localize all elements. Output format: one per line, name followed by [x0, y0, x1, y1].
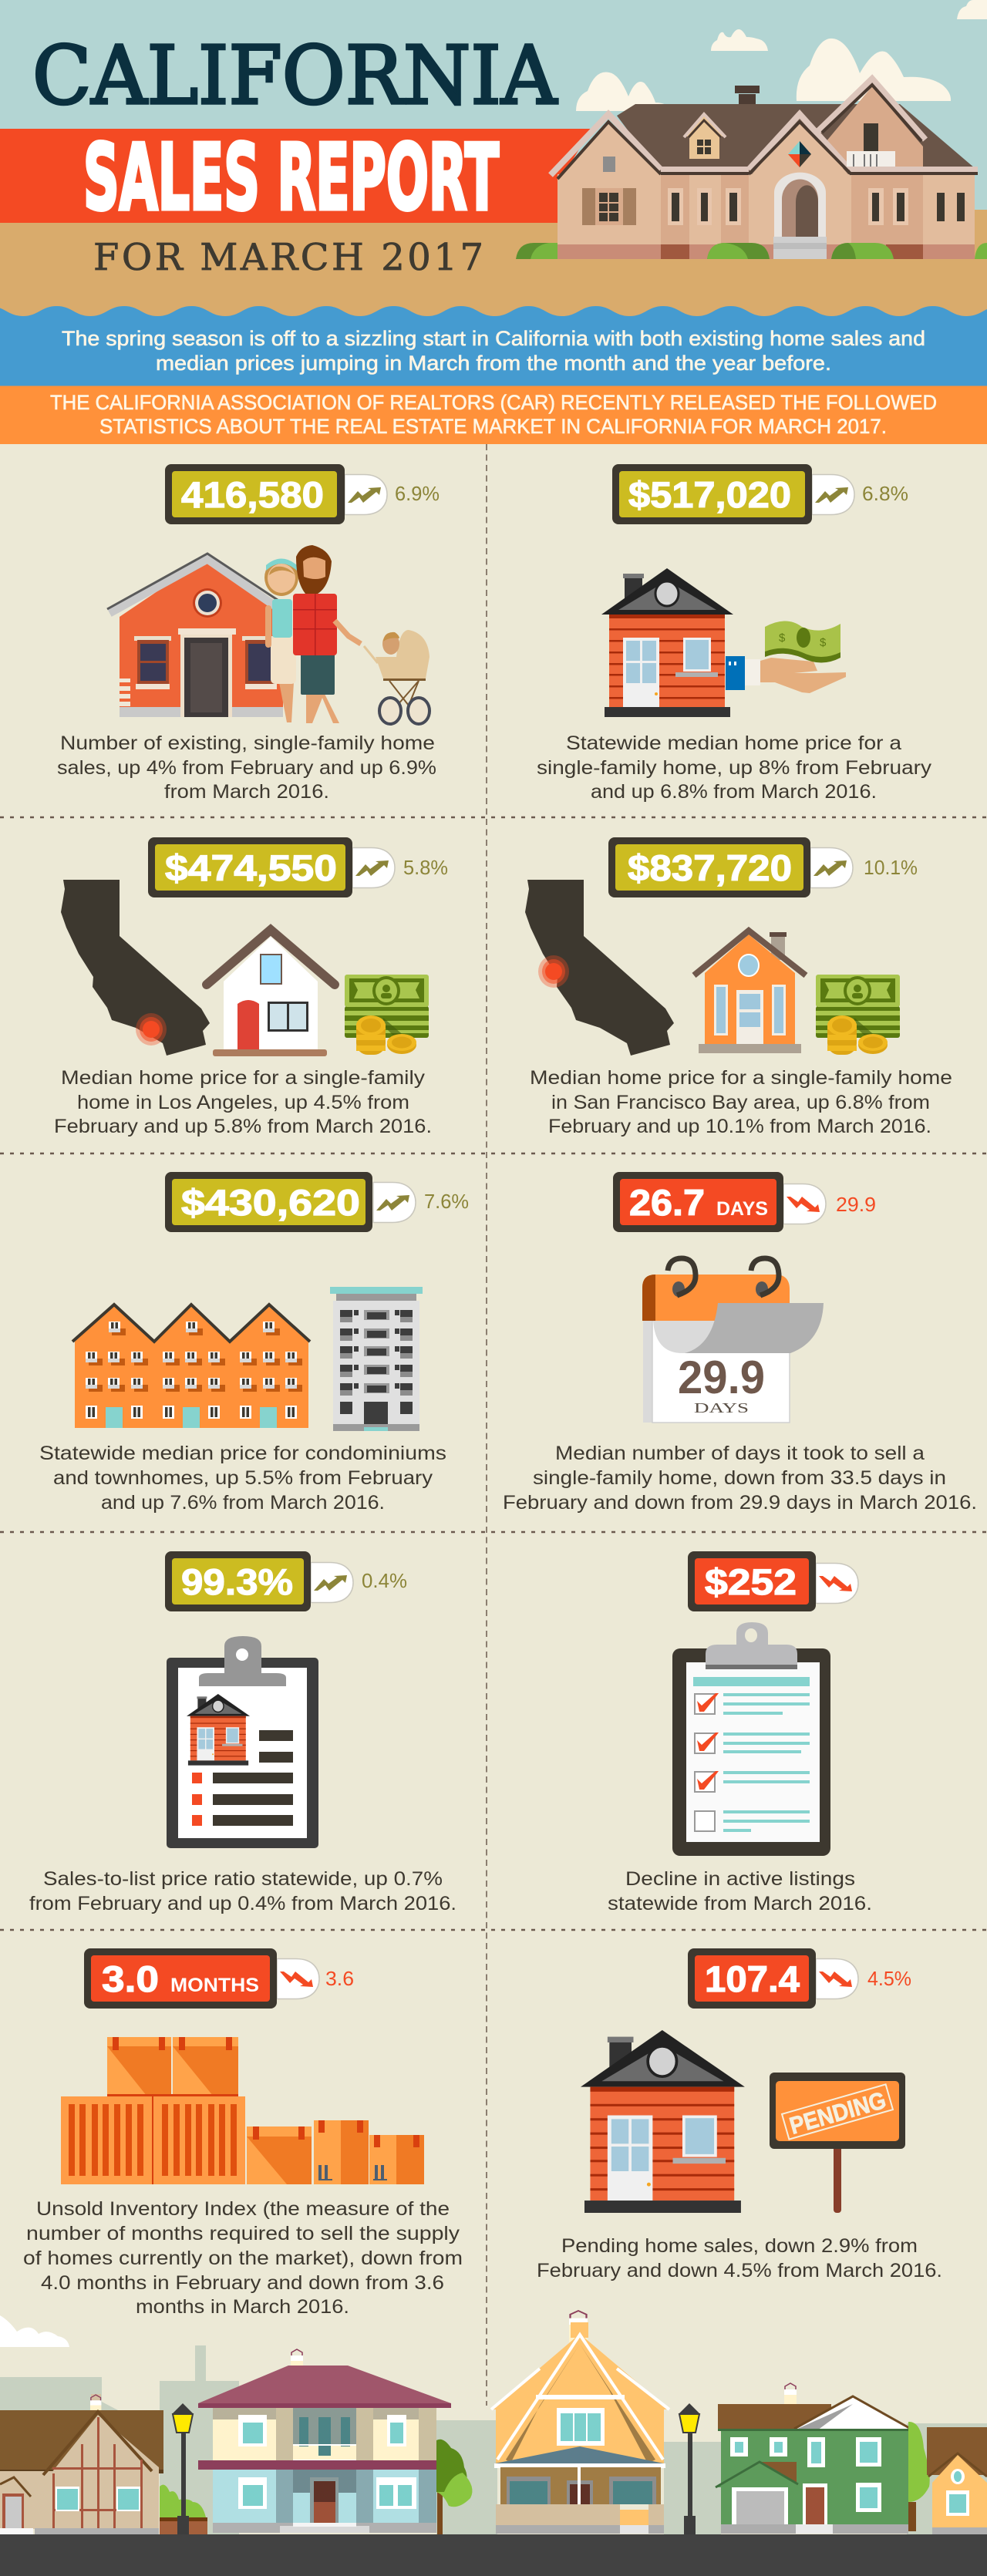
description: pending sales: Pending home sales, down 2.9% from	[561, 2235, 918, 2257]
panel: existing home sales	[57, 464, 440, 803]
panel: unsold inventory	[23, 1948, 463, 2318]
stat badge: 99.3%: 99.3%	[181, 1561, 293, 1602]
blue intro panel with wave top	[0, 306, 987, 386]
title: California: CALIFORNIA	[32, 29, 558, 123]
stat badge: 26.7 days: DAYS	[716, 1198, 768, 1220]
stat badge: $252	[688, 1551, 858, 1611]
orange panel text: STATISTICS ABOUT THE REAL ESTATE MARKET IN CALIFORNIA FOR MARCH 2017.	[99, 415, 887, 438]
description: San Francisco: in San Francisco Bay area, up 6.8% from	[551, 1092, 930, 1113]
description: Los Angeles: February and up 5.8% from March 2016.	[54, 1116, 432, 1137]
description: median price: Statewide median home price for a	[566, 732, 901, 754]
description: unsold inventory: months in March 2016.	[136, 2296, 349, 2318]
panel: Los Angeles	[54, 837, 448, 1137]
orange panel text	[50, 391, 937, 438]
stat badge: 107.4: 4.5%	[867, 1967, 911, 1990]
title: Sales Report: SALES REPORT	[83, 124, 499, 231]
description: sales-to-list: Sales-to-list price ratio statewide, up 0.7%	[43, 1868, 443, 1890]
description: median price: and up 6.8% from March 2016.	[591, 781, 877, 803]
description: active listings: statewide from March 2016.	[608, 1893, 872, 1914]
description: Los Angeles: Median home price for a single-family	[61, 1067, 426, 1089]
description: San Francisco: Median home price for a single-family home	[530, 1067, 952, 1089]
description: Los Angeles: home in Los Angeles, up 4.5% from	[77, 1092, 409, 1113]
footer: cloud	[0, 2315, 69, 2347]
icon: tear-off calendar	[642, 1258, 824, 1423]
icon: house with hand and money: $	[820, 636, 827, 649]
panel: San Francisco Bay	[525, 837, 952, 1137]
intro text: median prices jumping in March from the month and the year before.	[156, 352, 831, 375]
stat badge: $474,550: $474,550	[165, 847, 337, 888]
description: condominiums: and townhomes, up 5.5% from February	[53, 1467, 433, 1489]
description: unsold inventory: Unsold Inventory Index (the measure of the	[36, 2198, 450, 2220]
description: pending sales	[537, 2235, 942, 2281]
footer: green tree	[908, 2422, 930, 2531]
description: existing sales: from March 2016.	[164, 781, 329, 803]
description: unsold inventory	[23, 2198, 463, 2318]
stat badge: 3.0 months	[84, 1948, 354, 2009]
description: unsold inventory: 4.0 months in February and down from 3.6	[41, 2272, 444, 2294]
intro text: The spring season is off to a sizzling start in California with both existing home sales and	[62, 327, 925, 350]
stat badge: 3.0 months: 3.6	[325, 1967, 354, 1990]
orange panel text: THE CALIFORNIA ASSOCIATION OF REALTORS (CAR) RECENTLY RELEASED THE FOLLOWED	[50, 391, 937, 414]
description: active listings	[608, 1868, 872, 1914]
description: median price	[537, 732, 932, 803]
footer: maroon roof house	[198, 2349, 451, 2533]
footer: green house	[716, 2383, 911, 2534]
icon: pending sign: PENDING	[787, 2086, 889, 2140]
description: pending sales: February and down 4.5% from March 2016.	[537, 2260, 942, 2281]
stat badge: $517,020	[612, 464, 908, 524]
stat badge: 26.7 days: 29.9	[836, 1193, 876, 1216]
stat badge: 3.0 months: 3.0	[102, 1958, 159, 1999]
panel: active listings	[608, 1551, 872, 1914]
description: days to sell	[503, 1443, 977, 1514]
header: clouds	[576, 0, 987, 111]
description: days to sell: Median number of days it took to sell a	[555, 1443, 925, 1464]
stat badge: 3.0 months: MONTHS	[170, 1975, 259, 1996]
stat badge: $430,620: 7.6%	[424, 1190, 469, 1213]
description: days to sell: February and down from 29.9 days in March 2016.	[503, 1492, 977, 1514]
stat badge: 99.3%: 0.4%	[362, 1569, 407, 1592]
stat badge: 26.7 days	[613, 1172, 876, 1232]
description: unsold inventory: of homes currently on the market), down from	[23, 2248, 463, 2269]
panel: sales-to-list ratio	[29, 1551, 456, 1914]
panel: pending sales	[537, 1948, 942, 2281]
icon: house with hand and money: $	[779, 631, 786, 645]
stat badge: $430,620	[165, 1172, 469, 1232]
icon: townhouses	[72, 1305, 310, 1428]
description: existing sales	[57, 732, 436, 803]
header: sky	[0, 0, 987, 231]
stat badge: $430,620: $430,620	[181, 1182, 360, 1223]
stat badge: $474,550	[148, 837, 448, 897]
stat badge: 416,580: 416,580	[181, 474, 324, 515]
stat badge: 26.7 days: 26.7	[629, 1182, 705, 1223]
title: For March 2017: FOR MARCH 2017	[93, 236, 483, 279]
icon: apartment tower	[330, 1287, 423, 1431]
icon: tear-off calendar: 29.9	[678, 1352, 765, 1403]
description: unsold inventory: number of months required to sell the supply	[26, 2223, 460, 2244]
icon: house with hand and money	[601, 568, 846, 717]
panel: statewide median price	[537, 464, 932, 803]
footer: tree	[436, 2440, 472, 2534]
footer: street lamp left	[173, 2403, 193, 2534]
intro text	[62, 327, 925, 375]
header: red banner	[0, 129, 591, 223]
icon: tear-off calendar: DAYS	[694, 1400, 749, 1416]
panel: days to sell	[503, 1172, 977, 1514]
footer: bush and brick planter	[160, 2485, 207, 2534]
icon: red house	[581, 2030, 745, 2213]
icon: money and coins	[816, 975, 900, 1055]
stat badge: $837,720: $837,720	[628, 847, 792, 888]
stat badge: $837,720: 10.1%	[864, 856, 918, 879]
description: sales-to-list	[29, 1868, 456, 1914]
icon: family and red house	[107, 545, 429, 724]
footer: street lamp right	[679, 2403, 699, 2534]
description: San Francisco	[530, 1067, 952, 1137]
description: condominiums: Statewide median price for condominiums	[39, 1443, 446, 1464]
icon: stacked boxes	[61, 2037, 424, 2184]
description: condominiums: and up 7.6% from March 2016.	[101, 1492, 385, 1514]
footer: yellow gabled house	[491, 2311, 669, 2534]
stat badge: $837,720	[608, 837, 918, 897]
icon: money and coins	[345, 975, 429, 1055]
header: sand ground	[0, 129, 987, 324]
icon: clipboard with house	[167, 1636, 318, 1848]
description: condominiums	[39, 1443, 446, 1514]
description: active listings: Decline in active listings	[625, 1868, 855, 1890]
stat badge: 416,580: 6.9%	[395, 482, 440, 505]
stat badge: 107.4: 107.4	[705, 1958, 800, 1999]
icon: pending sign	[770, 2073, 905, 2213]
description: Los Angeles	[54, 1067, 432, 1137]
stat badge: $474,550: 5.8%	[403, 856, 448, 879]
stat badge: 416,580	[165, 464, 440, 524]
panel: condominiums	[39, 1172, 469, 1514]
illustration: shrubs	[516, 243, 987, 259]
footer: road	[0, 2534, 987, 2576]
icon: checklist clipboard	[672, 1622, 830, 1856]
stat badge: $517,020: 6.8%	[862, 482, 908, 505]
stat badge: $252: $252	[705, 1561, 797, 1602]
footer: orange corner house	[927, 2427, 987, 2535]
map: California with Bay Area marker	[525, 880, 674, 1056]
icon: white house	[207, 930, 335, 1056]
map: California with Los Angeles marker	[61, 880, 210, 1056]
footer: tudor house	[0, 2394, 163, 2535]
description: days to sell: single-family home, down from 33.5 days in	[533, 1467, 946, 1489]
footer: distant skyline	[0, 2345, 987, 2534]
icon: orange brick house	[694, 931, 806, 1053]
illustration: header mansion	[551, 79, 978, 259]
stat badge: 107.4	[688, 1948, 911, 2009]
orange intro panel	[0, 386, 987, 444]
description: median price: single-family home, up 8% from February	[537, 757, 932, 779]
stat badge: $517,020: $517,020	[628, 474, 791, 515]
description: existing sales: sales, up 4% from February and up 6.9%	[57, 757, 436, 779]
description: existing sales: Number of existing, single-family home	[60, 732, 435, 754]
description: San Francisco: February and up 10.1% from March 2016.	[548, 1116, 931, 1137]
stat badge: 99.3%	[165, 1551, 407, 1611]
description: sales-to-list: from February and up 0.4% from March 2016.	[29, 1893, 456, 1914]
